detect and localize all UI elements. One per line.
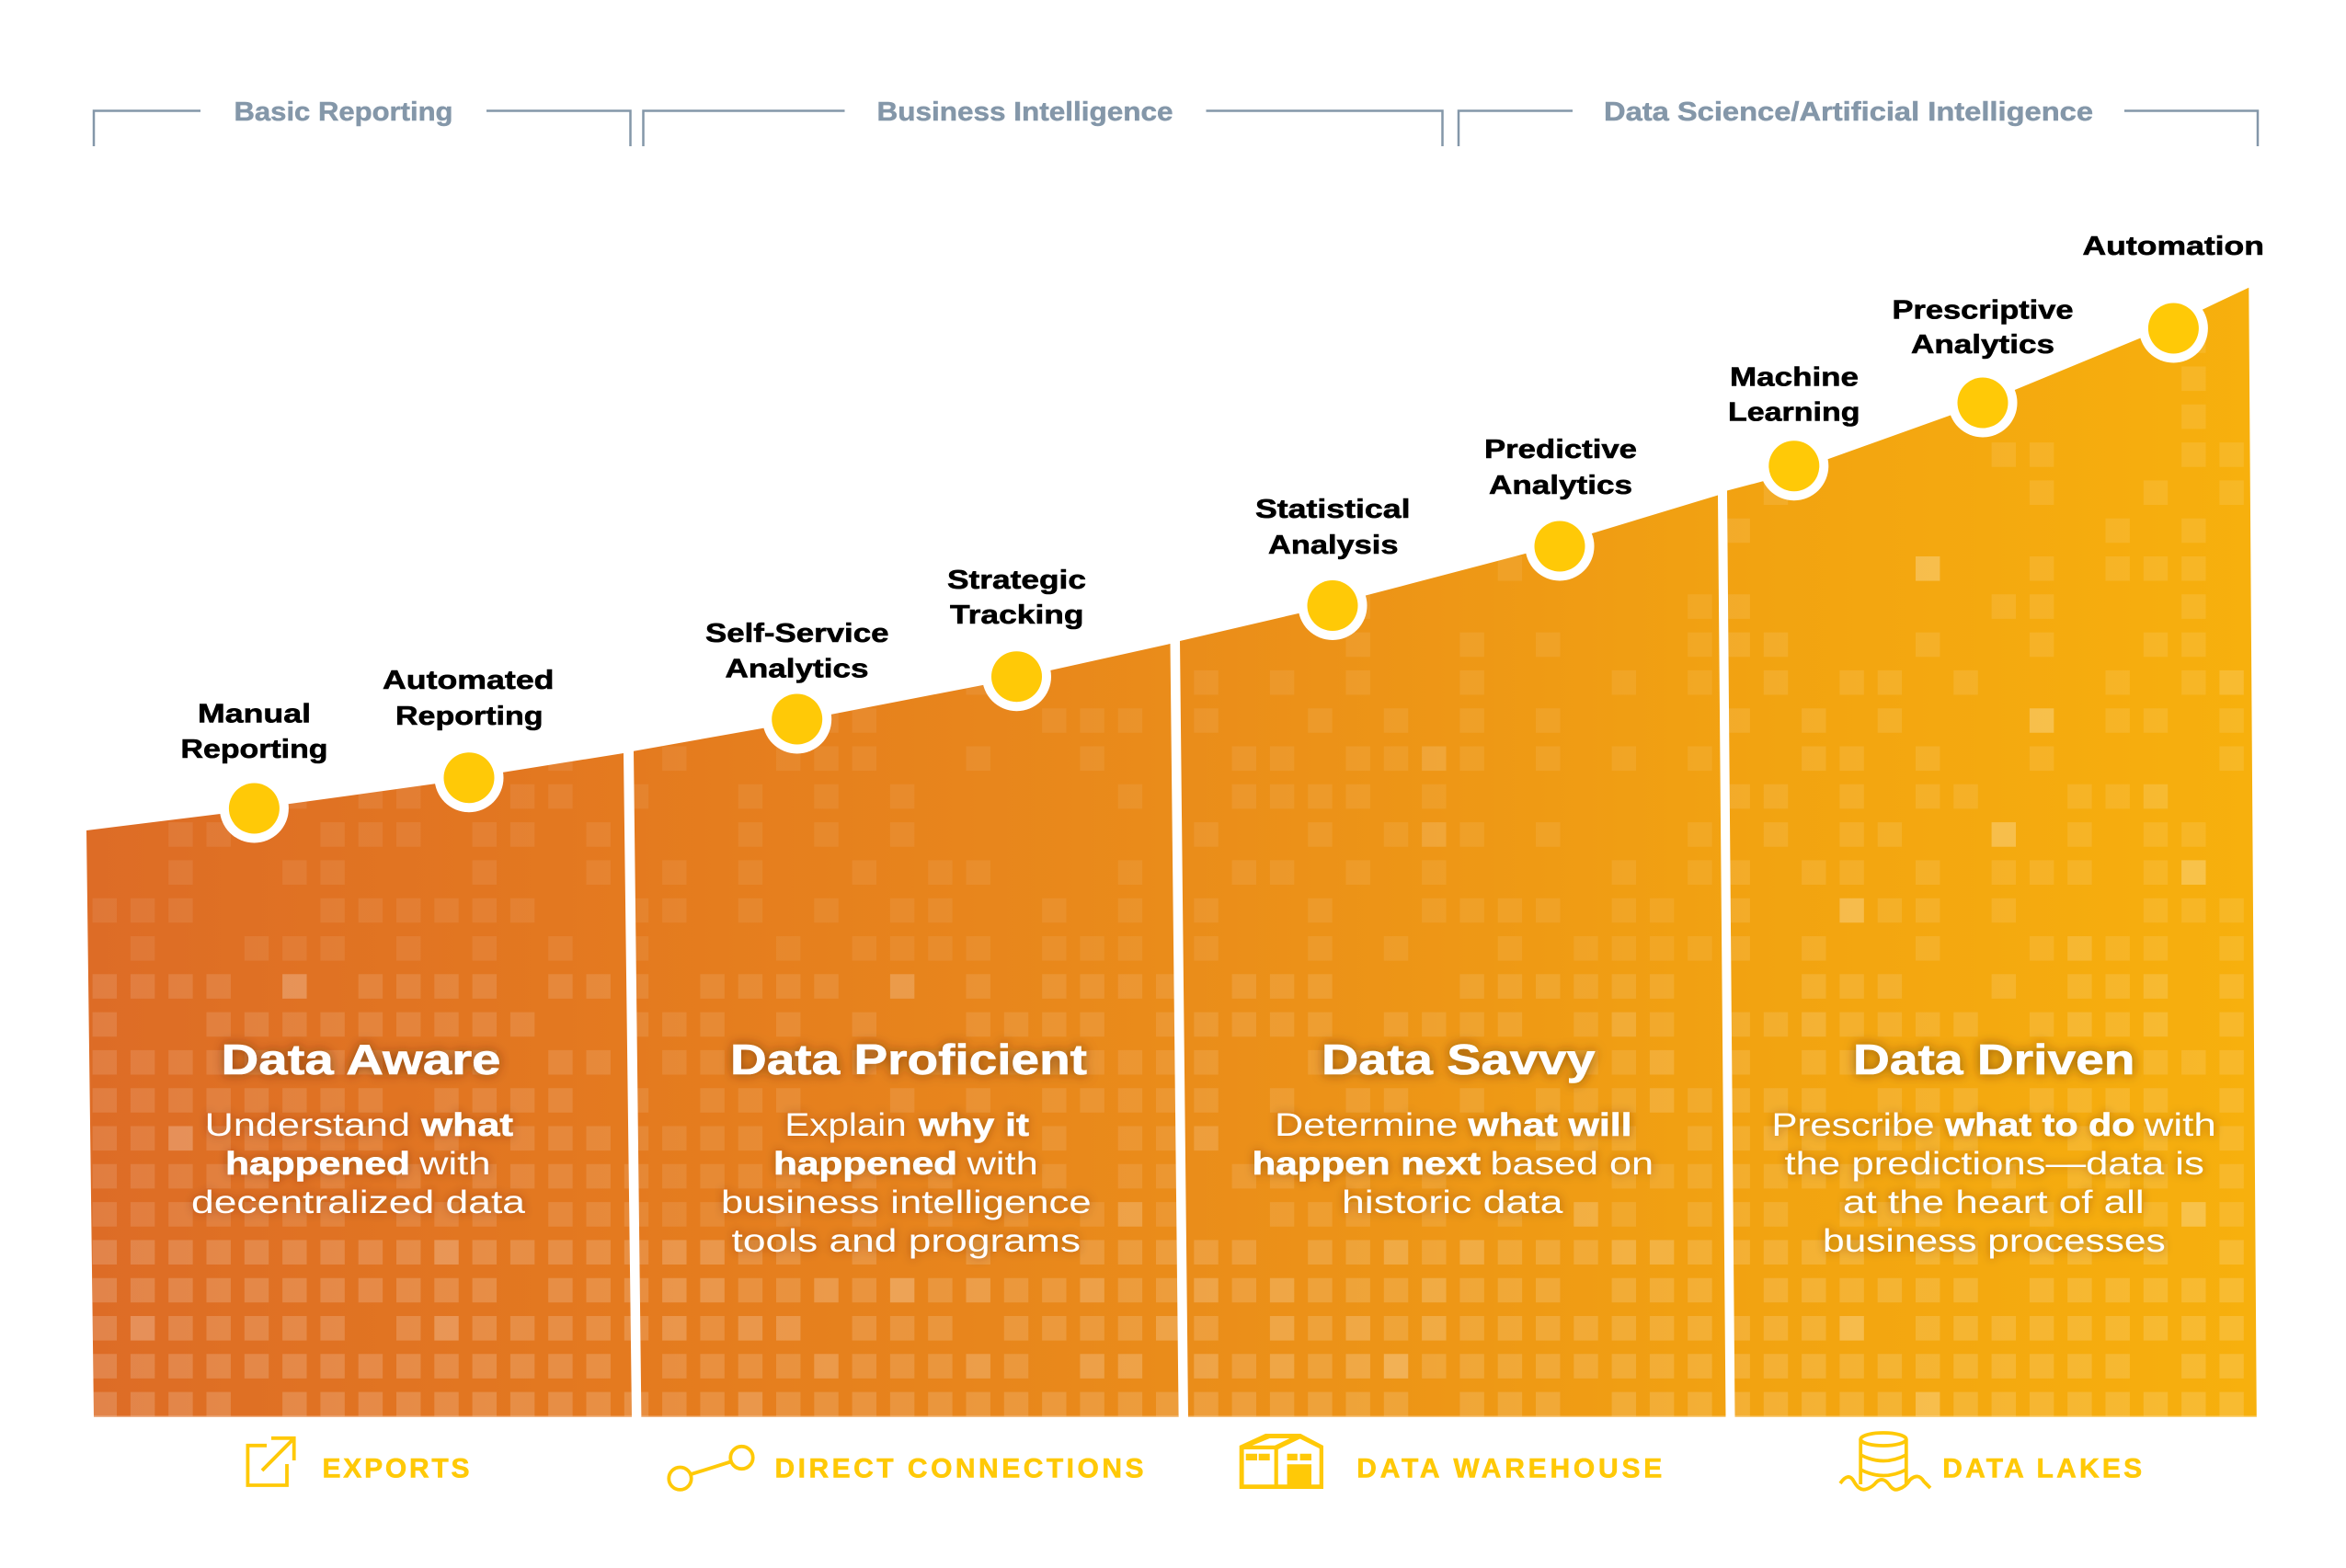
milestone: Manual Reporting: Manual <box>198 699 311 728</box>
title: Data Aware: Data Aware <box>221 1036 500 1083</box>
panel: Data Savvy <box>1180 495 1725 1417</box>
milestone: Predictive Analytics: Predictive <box>1484 435 1637 464</box>
text: Data Driven description <box>1771 1107 2216 1259</box>
icon: data warehouse <box>1240 1434 1323 1489</box>
milestone: Prescriptive Analytics: Analytics <box>1911 330 2054 360</box>
text: Data Aware description: what <box>420 1107 513 1143</box>
milestone: Predictive Analytics: Analytics <box>1489 471 1632 500</box>
text: Data Savvy description: happen next <box>1253 1146 1481 1182</box>
icon: direct connections <box>669 1447 753 1490</box>
milestone: Manual Reporting: Reporting <box>180 735 327 764</box>
text: Data Aware description: happened <box>225 1146 410 1182</box>
label: EXPORTS: EXPORTS <box>322 1454 469 1484</box>
text: Data Driven description: business processes <box>1823 1223 2166 1259</box>
milestone: Automation <box>2082 232 2264 362</box>
milestone: Machine Learning: Machine <box>1730 362 1859 392</box>
text: Data Savvy description <box>1253 1107 1654 1220</box>
bracket: Data Science/Artificial Intelligence <box>1459 97 2258 146</box>
milestone: Automated Reporting: Automated <box>383 666 554 695</box>
text: Data Aware description <box>191 1107 526 1220</box>
milestone: Statistical Analysis: Analysis <box>1268 531 1398 560</box>
milestone: Automated Reporting <box>383 666 554 812</box>
title: Data Driven: Data Driven <box>1853 1036 2135 1083</box>
label: DATA LAKES: DATA LAKES <box>1942 1454 2142 1484</box>
milestone: Prescriptive Analytics <box>1893 296 2073 438</box>
text: Data Savvy description: historic data <box>1342 1185 1563 1220</box>
title: Data Proficient: Data Proficient <box>730 1036 1087 1083</box>
text: Data Proficient description: happened <box>773 1146 957 1182</box>
text: Data Proficient description: business intelligence <box>721 1185 1092 1220</box>
milestone: Strategic Tracking: Tracking <box>950 601 1083 630</box>
panel: Data Driven <box>1725 288 2257 1417</box>
milestone: Automated Reporting: Reporting <box>395 702 543 731</box>
icon: exports <box>247 1438 294 1485</box>
milestone: Machine Learning: Learning <box>1728 397 1860 427</box>
text: Data Aware description: decentralized data <box>191 1185 526 1220</box>
milestone: Manual Reporting <box>180 699 327 842</box>
text: Data Proficient description: why it <box>918 1107 1029 1143</box>
text: Data Proficient description: Explain <box>784 1107 907 1143</box>
milestone: Predictive Analytics <box>1484 435 1637 581</box>
text: Data Proficient description: with <box>966 1146 1038 1182</box>
milestone: Prescriptive Analytics: Prescriptive <box>1893 296 2073 326</box>
milestone: Statistical Analysis <box>1255 495 1411 640</box>
text: Data Driven description: with <box>2143 1107 2216 1143</box>
bracket: Basic Reporting <box>94 97 631 146</box>
text: Data Savvy description: Determine <box>1275 1107 1458 1143</box>
label: DIRECT CONNECTIONS: DIRECT CONNECTIONS <box>774 1454 1144 1484</box>
milestone: Machine Learning <box>1728 362 1860 500</box>
text: Data Savvy description: based on <box>1490 1146 1654 1182</box>
text: Data Proficient description <box>721 1107 1092 1259</box>
text: Data Aware description: Understand <box>205 1107 410 1143</box>
milestone: Self-Service Analytics: Self-Service <box>705 619 888 648</box>
text: Data Aware description: with <box>418 1146 491 1182</box>
milestone: Statistical Analysis: Statistical <box>1255 495 1411 524</box>
text: Data Driven description: Prescribe <box>1771 1107 1935 1143</box>
text: Data Driven description: at the heart of all <box>1843 1185 2145 1220</box>
milestone: Strategic Tracking: Strategic <box>947 566 1086 595</box>
milestone: Self-Service Analytics: Analytics <box>725 655 868 684</box>
text: Data Proficient description: tools and programs <box>732 1223 1081 1259</box>
milestone: Strategic Tracking <box>947 566 1086 711</box>
text: Data Driven description: what to do <box>1944 1107 2135 1143</box>
heading: Data Science/Artificial Intelligence: Data Science/Artificial Intelligence <box>1604 97 2093 127</box>
text: Data Driven description: the predictions—data is <box>1784 1146 2204 1182</box>
title: Data Savvy: Data Savvy <box>1322 1036 1596 1083</box>
label: DATA WAREHOUSE: DATA WAREHOUSE <box>1356 1454 1662 1484</box>
milestone: Self-Service Analytics <box>705 619 888 754</box>
text: Data Savvy description: what will <box>1467 1107 1631 1143</box>
heading: Business Intelligence: Business Intelligence <box>877 97 1173 127</box>
icon: data lakes <box>1840 1433 1930 1490</box>
bracket: Business Intelligence <box>644 97 1442 146</box>
panel: Data Proficient <box>624 644 1180 1417</box>
heading: Basic Reporting: Basic Reporting <box>234 97 452 127</box>
panel: Data Aware <box>86 753 648 1417</box>
milestone: Automation: Automation <box>2082 232 2264 261</box>
